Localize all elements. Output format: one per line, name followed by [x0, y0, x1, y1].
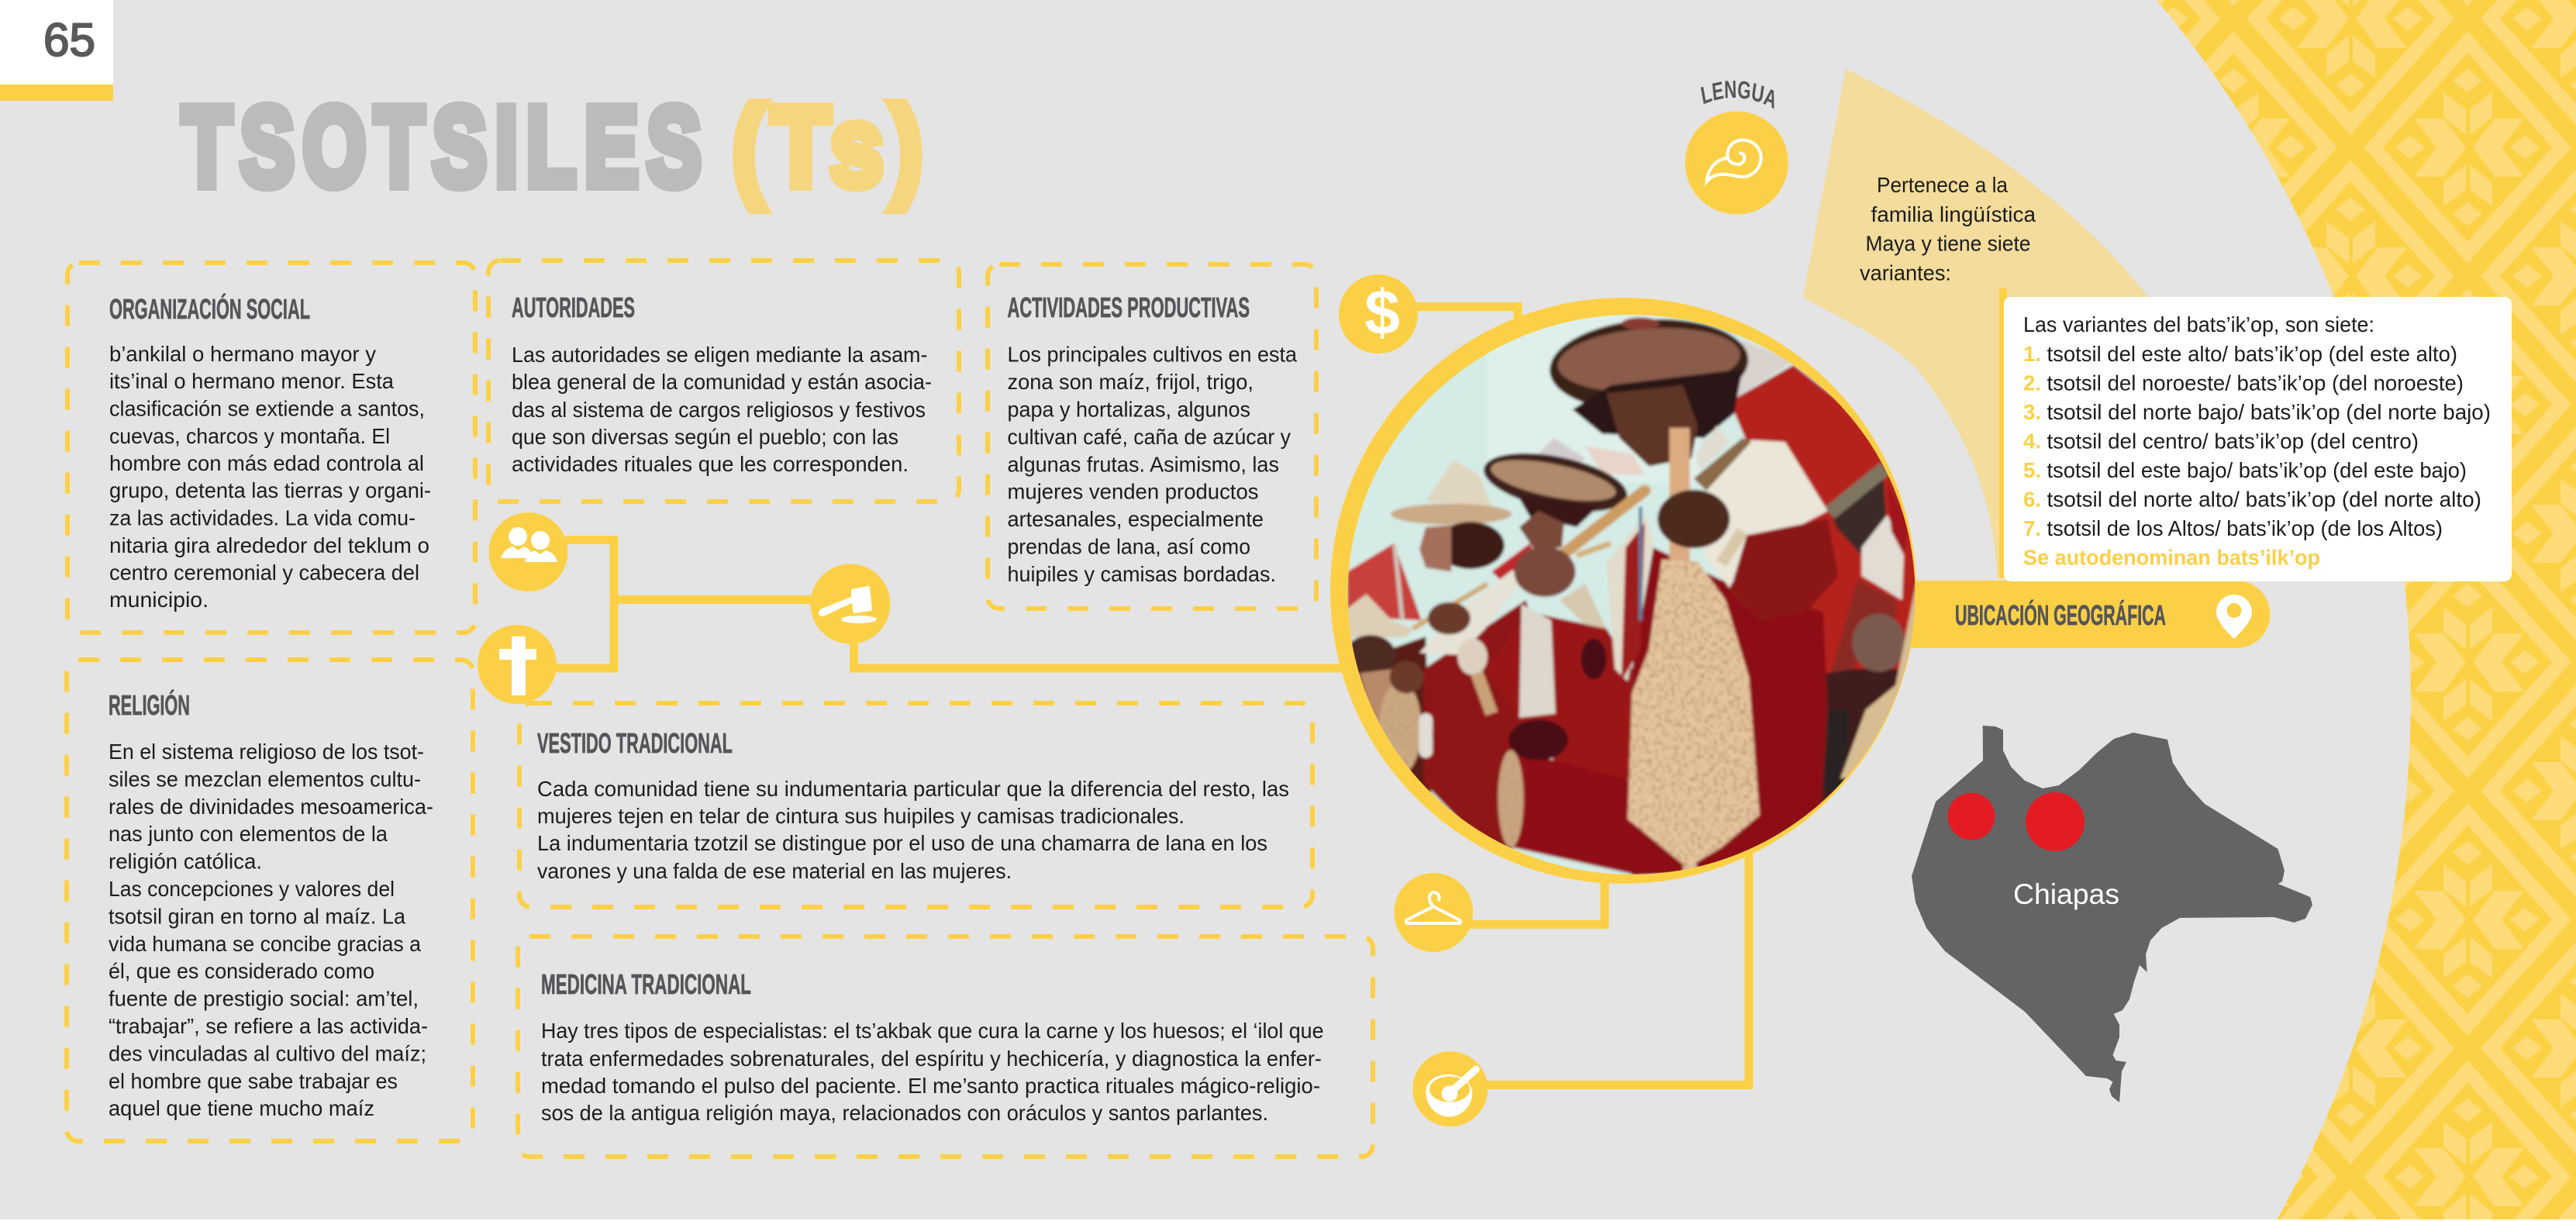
panel: medicina tradicional: medad tomando el pulso del paciente. El me’santo practica rituales mágico-religio- [541, 1074, 1320, 1098]
text: lengua description: Maya y tiene siete [1865, 231, 2031, 256]
panel: religión: tsotsil giran en torno al maíz. La [109, 904, 406, 928]
panel: autoridades: que son diversas según el pueblo; con las [512, 425, 898, 449]
panel: religión: el hombre que sabe trabajar es [109, 1069, 398, 1093]
panel: autoridades: Las autoridades se eligen mediante la asam- [512, 343, 927, 367]
panel: actividades productivas: cultivan café, caña de azúcar y [1008, 425, 1291, 449]
panel: actividades productivas: huipiles y camisas bordadas. [1008, 562, 1276, 586]
panel: organización social [67, 263, 475, 633]
map: Chiapas [1912, 726, 2312, 1102]
panel: variantes list [1999, 288, 2512, 581]
map: Chiapas: Chiapas [2013, 878, 2119, 910]
panel: religión: RELIGIÓN [109, 688, 190, 721]
panel: autoridades: blea general de la comunidad y están asocia- [512, 370, 932, 394]
panel: organización social: centro ceremonial y cabecera del [109, 560, 419, 585]
panel: religión: nas junto con elementos de la [109, 822, 388, 846]
panel: religión: religión católica. [109, 850, 262, 874]
panel: autoridades: actividades rituales que les corresponden. [512, 452, 909, 476]
panel: variantes list: tsotsil del noroeste/ bats’ik’op (del noroeste) [2047, 371, 2464, 395]
photo: tsotsil men in traditional dress [1347, 315, 1915, 874]
text: lengua description: variantes: [1860, 260, 1951, 285]
panel: religión: vida humana se concibe gracias a [109, 932, 422, 956]
photo ring [1330, 298, 1916, 884]
panel: actividades productivas: artesanales, especialmente [1008, 507, 1264, 531]
panel: religión: fuente de prestigio social: am’tel, [109, 987, 419, 1011]
panel: variantes list: Se autodenominan bats’ilk’op [2023, 546, 2320, 569]
page number tab: 65 [43, 14, 95, 66]
panel: medicina tradicional: sos de la antigua religión maya, relacionados con oráculos y santos parlantes. [541, 1101, 1268, 1125]
panel: organización social: its’inal o hermano menor. Esta [109, 369, 395, 393]
panel: vestido tradicional: VESTIDO TRADICIONAL [537, 727, 733, 759]
icon: hanger [1394, 873, 1473, 952]
panel: actividades productivas: papa y hortalizas, algunos [1008, 397, 1250, 422]
panel: variantes list: 6. [2023, 487, 2041, 512]
panel: variantes list: tsotsil del norte alto/ bats’ik’op (del norte alto) [2047, 487, 2481, 512]
panel: variantes list: 7. [2023, 516, 2041, 540]
panel: organización social: clasificación se extiende a santos, [109, 397, 425, 420]
panel: religión: Las concepciones y valores del [109, 877, 395, 901]
language fan shape [1803, 69, 2217, 581]
panel: religión: “trabajar”, se refiere a las activida- [109, 1014, 428, 1038]
page number tab [0, 0, 113, 101]
panel: organización social: nitaria gira alrededor del teklum o [109, 533, 429, 557]
heading: lengua (curved): LENGUA [1701, 81, 1774, 109]
panel: variantes list: Las variantes del bats’ik’op, son siete: [2023, 312, 2374, 336]
panel: vestido tradicional: Cada comunidad tiene su indumentaria particular que la diferencia del resto, las [537, 777, 1289, 801]
panel: variantes list: tsotsil del norte bajo/ bats’ik’op (del norte bajo) [2047, 400, 2491, 424]
panel: actividades productivas: algunas frutas. Asimismo, las [1008, 452, 1279, 476]
icon: mortar [1412, 1051, 1488, 1126]
panel: organización social: b’ankilal o hermano mayor y [109, 342, 376, 366]
panel: actividades productivas: prendas de lana, así como [1008, 535, 1250, 558]
panel: religión: siles se mezclan elementos cultu- [109, 767, 421, 791]
panel: actividades productivas [988, 264, 1316, 609]
panel: medicina tradicional [518, 936, 1373, 1157]
panel: variantes list: 5. [2023, 458, 2041, 482]
panel: organización social: cuevas, charcos y montaña. El [109, 424, 390, 448]
panel: religión: En el sistema religioso de los tsot- [109, 740, 424, 764]
title: (Ts) [733, 84, 929, 209]
panel: actividades productivas: Los principales cultivos en esta [1008, 343, 1298, 367]
panel: actividades productivas: mujeres venden productos [1008, 480, 1259, 504]
panel: vestido tradicional: La indumentaria tzotzil se distingue por el uso de una chamarra de lana en los [537, 831, 1267, 855]
panel: autoridades: das al sistema de cargos religiosos y festivos [512, 398, 926, 422]
text: lengua description: familia lingüística [1871, 202, 2036, 226]
heading: lengua (curved) [1701, 81, 1774, 109]
panel: organización social: grupo, detenta las tierras y organi- [109, 478, 431, 502]
text: lengua description [1860, 173, 2036, 285]
panel: variantes list: 2. [2023, 371, 2041, 395]
panel: variantes list: tsotsil del este alto/ bats’ik’op (del este alto) [2047, 342, 2457, 366]
panel: religión: él, que es considerado como [109, 959, 374, 983]
panel: autoridades: AUTORIDADES [512, 291, 635, 323]
label bar: ubicación geográfica [1860, 581, 2270, 648]
panel: variantes list: tsotsil del centro/ bats’ik’op (del centro) [2047, 429, 2419, 453]
icon: lengua swirl [1685, 112, 1788, 214]
panel: autoridades [488, 260, 959, 502]
icon: dollar: $ [1364, 278, 1400, 348]
icon: dollar [1339, 274, 1418, 354]
panel: organización social: municipio. [109, 588, 209, 612]
panel: vestido tradicional: mujeres tejen en telar de cintura sus huipiles y camisas tradicionales. [537, 804, 1185, 828]
panel: variantes list: 4. [2023, 429, 2041, 453]
icon: people [488, 512, 567, 592]
panel: religión [67, 660, 473, 1141]
panel: variantes list: tsotsil del este bajo/ bats’ik’op (del este bajo) [2047, 458, 2467, 482]
title: TSOTSILES [182, 84, 709, 209]
panel: actividades productivas: zona son maíz, frijol, trigo, [1008, 370, 1254, 394]
panel: actividades productivas: ACTIVIDADES PRODUCTIVAS [1008, 291, 1250, 323]
panel: organización social: ORGANIZACIÓN SOCIAL [109, 292, 310, 325]
text: lengua description: Pertenece a la [1877, 173, 2009, 197]
panel: organización social: hombre con más edad controla al [109, 451, 424, 475]
panel: religión: aquel que tiene mucho maíz [109, 1096, 374, 1120]
panel: variantes list: tsotsil de los Altos/ bats’ik’op (de los Altos) [2047, 516, 2443, 540]
panel: variantes list: 1. [2023, 342, 2041, 366]
icon: gavel [811, 564, 890, 643]
panel: medicina tradicional: trata enfermedades sobrenaturales, del espíritu y hechicería, y diagnostica la enfer- [541, 1047, 1322, 1071]
label bar: ubicación geográfica: UBICACIÓN GEOGRÁFICA [1955, 598, 2166, 631]
panel: medicina tradicional: MEDICINA TRADICIONAL [541, 968, 751, 1000]
panel: vestido tradicional [519, 703, 1312, 907]
panel: religión: rales de divinidades mesoamerica- [109, 795, 433, 819]
panel: organización social: za las actividades. La vida comu- [109, 505, 416, 530]
panel: medicina tradicional: Hay tres tipos de especialistas: el ts’akbak que cura la carne y los huesos; el ‘ilol que [541, 1019, 1324, 1043]
panel: variantes list: 3. [2023, 400, 2041, 424]
panel: vestido tradicional: varones y una falda de ese material en las mujeres. [537, 859, 1012, 883]
icon: cross [478, 625, 557, 704]
connector lines [554, 307, 1749, 1085]
panel: religión: des vinculadas al cultivo del maíz; [109, 1041, 426, 1065]
